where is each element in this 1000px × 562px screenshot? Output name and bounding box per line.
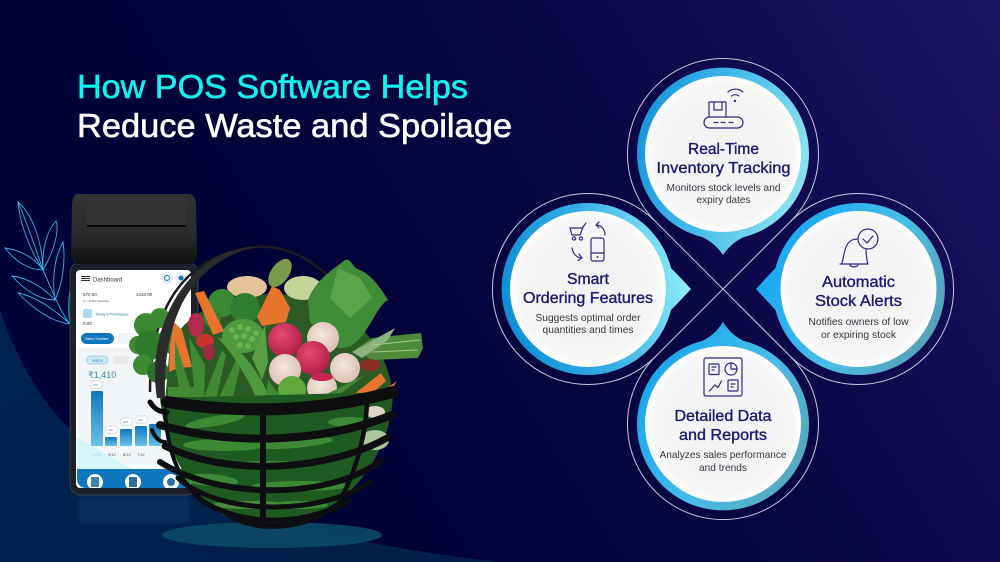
panel: automatic stock alerts: or expiring stock [821, 329, 897, 341]
vegetable basket [129, 247, 423, 526]
description: Notifies owners of low [808, 316, 909, 328]
top vegetables [203, 255, 388, 348]
title: How POS Software Helps [77, 69, 468, 106]
POS device [70, 194, 198, 495]
heading: Smart [567, 271, 610, 288]
panel: automatic stock alerts: Stock Alerts [815, 293, 902, 310]
base of vegetables [165, 294, 392, 402]
outer ring [492, 193, 656, 384]
device screen: ₹1,410 [88, 370, 116, 380]
bar chart: 670 [93, 383, 98, 387]
heading: Automatic [822, 274, 895, 291]
basket back handle [150, 247, 330, 392]
device screen: 670.00 [83, 292, 97, 297]
pointer and blue ring [637, 322, 809, 510]
carrots [169, 286, 397, 402]
green beans front [168, 325, 365, 402]
device screen: Sales Timeline [85, 337, 108, 341]
bar chart: 9/12 [108, 452, 117, 457]
icon: report dashboard [704, 358, 742, 396]
panel: detailed data and reports: and trends [699, 462, 747, 474]
device body [70, 262, 198, 495]
device shadow [78, 496, 190, 524]
panel: smart ordering features: quantities and times [542, 324, 634, 336]
arc tint over screen [76, 437, 132, 469]
icon: decorative leaf branch [5, 202, 72, 324]
icon: bell with checkmark [840, 229, 878, 267]
title: Reduce Waste and Spoilage [77, 108, 512, 145]
bar chart: 7/12 [137, 452, 146, 457]
device screen: vs ↑ 570% Yesterday [83, 299, 110, 303]
bar chart: 200 [123, 420, 128, 424]
panel: real-time inventory tracking [628, 58, 819, 255]
panel: automatic stock alerts [756, 193, 954, 384]
outer ring [628, 58, 819, 222]
bar chart: 10/12 [92, 452, 103, 457]
white disc [780, 211, 936, 367]
description: Suggests optimal order [536, 312, 641, 324]
device screen: Dashboard [93, 278, 122, 284]
title [77, 69, 512, 145]
panel: detailed data and reports [628, 322, 819, 520]
bar chart: 100 [108, 428, 113, 432]
panel: smart ordering features: Ordering Features [523, 290, 653, 307]
pointer and blue ring [756, 203, 945, 375]
device screen: 1410.00 [136, 292, 153, 297]
bottom navigation bar [76, 469, 191, 494]
leafy greens left [129, 308, 186, 383]
cross connector lines [656, 222, 790, 356]
description: Monitors stock levels and [666, 182, 781, 194]
peas [222, 319, 264, 353]
white disc [510, 211, 666, 367]
bar chart: 240 [138, 418, 143, 422]
device screen: Today's Purchases [95, 312, 128, 316]
lettuce right [308, 260, 388, 348]
basket shadow [162, 522, 382, 548]
radishes [268, 322, 380, 404]
icon: cart, phone and arrows [570, 222, 605, 261]
description: Analyzes sales performance [660, 449, 787, 461]
heading: Real-Time [688, 141, 759, 158]
device screen: WEEK [92, 359, 104, 363]
pointer and blue ring [637, 68, 809, 255]
pointer and blue ring [502, 203, 691, 375]
white disc [645, 76, 801, 232]
basket interior beans [160, 392, 393, 522]
outer ring [628, 356, 819, 520]
panel: real-time inventory tracking: Inventory Tracking [656, 160, 790, 177]
basket front bands [150, 392, 393, 526]
panel: detailed data and reports: and Reports [679, 427, 767, 444]
heading: Detailed Data [674, 408, 772, 425]
device screen: 0.00 [83, 321, 92, 326]
bar chart: 8/12 [123, 452, 132, 457]
basket front handle [155, 247, 258, 398]
panel: smart ordering features [492, 193, 691, 384]
device screen [76, 270, 191, 494]
bar chart [91, 381, 161, 457]
icon: conveyor with box and wifi [704, 89, 743, 128]
receipt printer head [71, 194, 197, 264]
bean highlights [182, 406, 389, 509]
scallions [352, 328, 423, 360]
small radishes [188, 313, 204, 337]
outer ring [790, 193, 954, 384]
background arc [0, 310, 500, 562]
white disc [645, 346, 801, 502]
panel: real-time inventory tracking: expiry dates [696, 194, 750, 206]
